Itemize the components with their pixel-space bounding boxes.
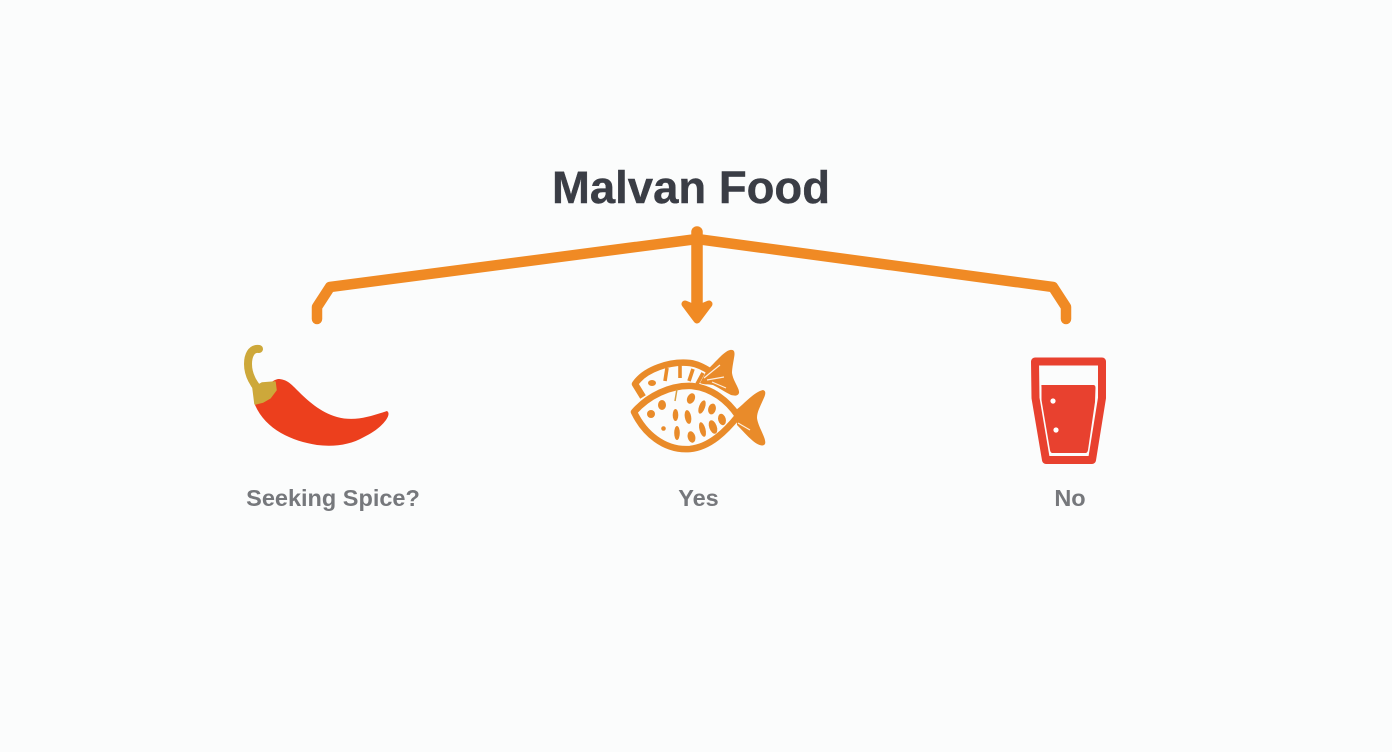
back fish — [634, 350, 739, 397]
center arrow — [685, 232, 709, 320]
right branch — [697, 239, 1066, 319]
fish spots — [647, 389, 727, 444]
label: Yes: Yes — [678, 485, 719, 511]
label: No: No — [1054, 485, 1086, 511]
icon: glass of red drink — [1035, 362, 1102, 460]
icon: fish — [634, 350, 765, 449]
front fish — [634, 386, 765, 449]
icon: chili pepper — [248, 349, 389, 446]
title: Malvan Food — [552, 162, 830, 213]
branching connector — [317, 232, 1066, 320]
label: Seeking Spice?: Seeking Spice? — [246, 485, 420, 511]
left branch — [317, 239, 697, 319]
